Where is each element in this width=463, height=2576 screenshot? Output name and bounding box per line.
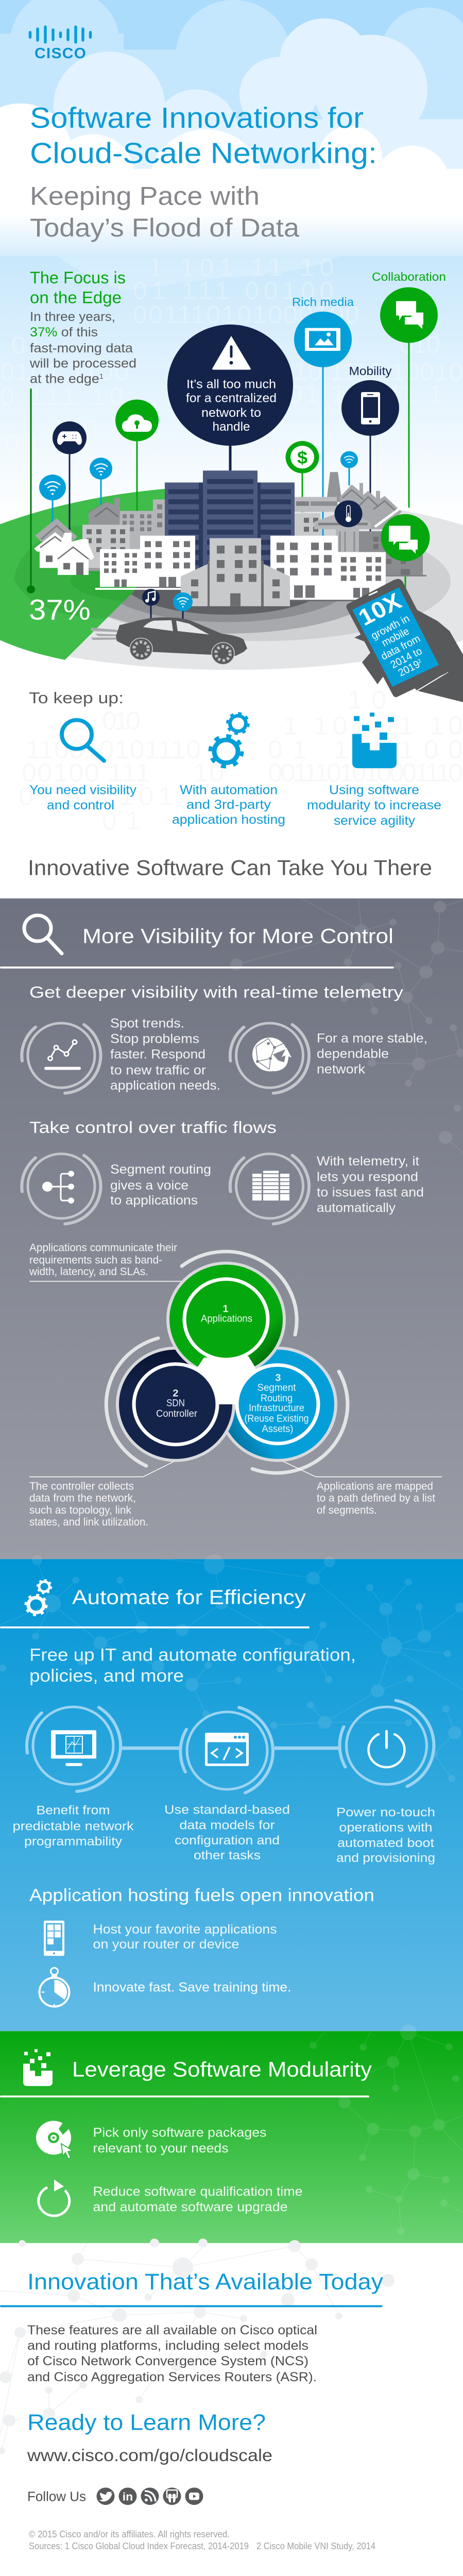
item: data models: data models for — [180, 1819, 275, 1832]
item: respond to issues: automatically — [317, 1201, 396, 1215]
item: no-touch operations: automated boot — [337, 1836, 434, 1850]
icon: white magnifier — [24, 916, 62, 954]
icon: dollar: $ — [297, 448, 307, 468]
big callout: too much for a centralized network: network to — [201, 406, 261, 420]
text block: the focus is on the edge: The Focus is — [30, 268, 126, 287]
panel: leverage software modularity — [0, 2024, 463, 2243]
item: host applications: Host your favorite applications — [93, 1922, 277, 1937]
subheading: free up IT: policies, and more — [29, 1666, 184, 1686]
text block: the focus is on the edge: on the Edge — [30, 289, 122, 307]
annotation: controller collects — [29, 1462, 174, 1528]
title — [30, 102, 377, 170]
text block: availability: These features are all available on Cisco optical — [27, 2324, 317, 2337]
icon: thermometer — [335, 500, 363, 527]
annotation: applications communicate: requirements such as band- — [29, 1253, 162, 1266]
text block: the focus is on the edge: will be processed — [29, 357, 136, 371]
annotation: applications communicate: width, latency, and SLAs. — [29, 1265, 148, 1278]
label: applications: 1 — [222, 1303, 229, 1314]
hand holding phone: 10X growth — [346, 579, 463, 702]
icon: rss — [141, 2487, 159, 2505]
heading: to keep up: To keep up: — [29, 689, 124, 707]
heading: innovation today: Innovation That’s Available Today — [27, 2269, 383, 2294]
item: spot trends: application needs. — [110, 1079, 220, 1093]
item: segment routing: Segment routing — [110, 1163, 211, 1177]
decorative binary digits in sky: 010 — [399, 331, 440, 359]
label: applications: Applications — [201, 1313, 252, 1324]
icon: youtube — [185, 2487, 203, 2505]
item: programmability: predictable network — [12, 1820, 134, 1833]
subheading: free up IT: Free up IT and automate configuration, — [29, 1645, 356, 1665]
item: stable network: For a more stable, — [317, 1031, 427, 1045]
cityscape ground ellipses — [0, 496, 463, 670]
captions: to keep up: With automation — [180, 783, 278, 797]
hand holding phone: 10X growth: data from — [379, 633, 422, 663]
37% statistic: 37% — [29, 594, 91, 626]
follow us: Follow Us — [27, 2489, 86, 2504]
decorative binary digits keep up — [19, 685, 463, 835]
heading: innovative software: Innovative Software Can Take You There — [28, 856, 432, 879]
text block: availability: and routing platforms, including select models — [27, 2339, 308, 2353]
decorative binary digits in sky: 01 10 111 1 — [288, 381, 443, 408]
item: spot trends: to new traffic or — [110, 1063, 207, 1077]
item: host applications — [44, 1921, 277, 1956]
callout: collaboration: Collaboration — [372, 270, 446, 283]
icon: car wifi — [173, 592, 193, 611]
label: SDN controller: 2 — [173, 1388, 179, 1399]
icon: small wifi right — [340, 451, 358, 468]
green edge wedge — [0, 488, 170, 660]
annotation: applications are mapped: Applications are mapped — [317, 1480, 433, 1492]
callout: rich media: Rich media — [292, 296, 354, 309]
label: SDN controller: Controller — [156, 1408, 197, 1419]
callout: mobility — [341, 365, 399, 436]
item: no-touch operations: operations with — [339, 1821, 432, 1835]
annotation: controller collects: data from the network, — [29, 1492, 136, 1504]
right back buildings and factory — [295, 472, 426, 577]
label: segment routing infrastructure: Segment — [258, 1382, 296, 1394]
item: pick packages — [36, 2121, 267, 2159]
icon: gears — [210, 714, 248, 767]
decorative binary digits in sky: 1 101 11 10 — [148, 254, 334, 281]
icon: dollar — [285, 441, 319, 473]
footnotes: Sources: 1 Cisco Global Cloud Index Forecast, 2014-2019 — [29, 2540, 249, 2551]
label: segment routing infrastructure: Assets) — [262, 1423, 294, 1435]
item: stable network: network — [317, 1062, 365, 1076]
connectors — [121, 1747, 339, 1750]
white building left — [95, 536, 195, 590]
icon: game controller — [53, 421, 87, 454]
item: spot trends: faster. Respond — [110, 1047, 205, 1061]
Cisco logo: CISCO — [35, 45, 86, 62]
item: spot trends: Spot trends. — [110, 1016, 184, 1030]
annotation: applications communicate — [29, 1241, 181, 1281]
item: stable network — [230, 1023, 427, 1093]
central navy towers — [165, 470, 295, 590]
item: reduce qualification time: and automate software upgrade — [93, 2200, 287, 2214]
icon: warning triangle — [212, 336, 251, 370]
item: pick packages: relevant to your needs — [93, 2142, 229, 2156]
item: respond to issues: lets you respond — [317, 1170, 418, 1184]
subtitle: Keeping Pace with — [30, 181, 260, 210]
decorative binary digits keep up: 01 11 101 — [19, 782, 173, 810]
item: pick packages: Pick only software packages — [93, 2126, 267, 2140]
captions: to keep up: and control — [47, 799, 114, 812]
annotation: controller collects: The controller collects — [29, 1480, 134, 1492]
white houses — [34, 532, 94, 575]
section heading: automate: Automate for Efficiency — [72, 1586, 306, 1608]
label: SDN controller — [156, 1388, 197, 1419]
hand holding phone: 10X growth: 2014 to — [388, 645, 424, 671]
label: segment routing infrastructure: (Reuse Existing — [244, 1413, 309, 1424]
panel: innovation available today — [0, 2239, 395, 2551]
panel: automate for efficiency — [0, 1554, 463, 2031]
hand holding phone: 10X growth: 10X — [354, 588, 406, 631]
subheading: telemetry: Get deeper visibility with real-time telemetry — [29, 983, 404, 1002]
hand holding phone: 10X growth: mobile — [380, 625, 411, 649]
icon: linkedin — [118, 2487, 137, 2505]
decorative binary digits keep up: 010 — [102, 706, 141, 735]
footnotes — [29, 2529, 375, 2551]
icon: wifi left — [39, 474, 66, 500]
footnotes: 2 Cisco Mobile VNI Study, 2014 — [256, 2540, 375, 2551]
annotation: controller collects: states, and link utilization. — [29, 1515, 148, 1528]
icon: collaboration lower — [381, 514, 430, 561]
item: respond to issues: With telemetry, it — [317, 1154, 419, 1168]
callout: mobility: Mobility — [349, 365, 392, 378]
item: no-touch operations: and provisioning — [336, 1851, 435, 1865]
icon: white gears — [26, 1580, 52, 1615]
Cisco logo — [30, 27, 91, 62]
annotation: controller collects: such as topology, link — [29, 1503, 131, 1516]
decorative binary digits keep up: 1 0 — [348, 685, 386, 714]
label: segment routing infrastructure — [244, 1372, 309, 1435]
text block: availability: and Cisco Aggregation Services Routers (ASR). — [27, 2370, 317, 2384]
decorative binary digits keep up: 00100 111 — [22, 758, 150, 787]
item: data models: other tasks — [194, 1849, 261, 1862]
captions: to keep up: service agility — [334, 814, 415, 828]
text block: the focus is on the edge: 37% of this — [30, 325, 98, 340]
decorative binary digits in sky: 0101 1100 — [0, 359, 129, 386]
title: Software Innovations for — [30, 102, 364, 134]
annotation: applications communicate: Applications communicate their — [29, 1241, 177, 1254]
item: reduce qualification time — [39, 2179, 302, 2216]
decorative binary digits in sky: 0 111 10 — [0, 383, 124, 411]
item: innovate fast: Innovate fast. Save training time. — [93, 1980, 291, 1995]
car — [91, 617, 247, 665]
icon: magnifier — [62, 720, 104, 761]
title: Cloud-Scale Networking: — [30, 137, 377, 170]
heading: ready to learn more: Ready to Learn More? — [27, 2410, 266, 2435]
icons: social — [97, 2487, 203, 2505]
item: spot trends: Stop problems — [110, 1032, 199, 1046]
subheading: traffic flows: Take control over traffic flows — [29, 1118, 277, 1137]
decorative binary digits keep up: 10 — [193, 758, 224, 787]
label: segment routing infrastructure: 3 — [275, 1372, 281, 1383]
hand holding phone: 10X growth: 2019 — [396, 658, 423, 679]
decorative binary digits keep up: 0011101010001110 — [268, 758, 463, 787]
captions: to keep up: Using software — [329, 783, 419, 797]
back buildings left — [35, 498, 165, 571]
item: respond to issues: to issues fast and — [317, 1185, 424, 1199]
section heading: leverage: Leverage Software Modularity — [72, 2058, 372, 2081]
icon: white modules — [23, 2049, 53, 2086]
item: host applications: on your router or device — [93, 1937, 239, 1952]
icon: linkedin: in — [123, 2490, 133, 2503]
centre front grey building — [181, 538, 290, 606]
subtitle — [30, 181, 300, 242]
url: www.cisco.com/go/cloudscale — [27, 2446, 272, 2465]
big callout: too much for a centralized network — [167, 325, 293, 446]
decorative binary digits in sky: 01 11 — [5, 430, 93, 458]
decorative binary digits keep up: 110010101110 — [26, 735, 201, 764]
icon: wifi middle — [90, 457, 112, 480]
decorative binary digits keep up: 010 — [345, 782, 386, 810]
decorative binary digits in sky: 001110101000100 — [133, 301, 359, 329]
captions: to keep up: application hosting — [172, 813, 285, 827]
callout: collaboration — [372, 270, 446, 343]
text block: the focus is on the edge: fast-moving data — [30, 341, 133, 355]
label: applications — [201, 1303, 252, 1324]
label: SDN controller: SDN — [166, 1398, 185, 1409]
item: spot trends — [22, 1016, 220, 1093]
item: programmability: programmability — [24, 1835, 123, 1849]
captions: to keep up: modularity to increase — [307, 799, 441, 812]
text block: the focus is on the edge — [29, 268, 136, 386]
decorative binary digits in sky — [0, 254, 463, 458]
captions: to keep up — [29, 783, 441, 828]
item: programmability — [12, 1707, 134, 1849]
item: no-touch operations — [336, 1701, 435, 1865]
captions: to keep up: You need visibility — [29, 783, 136, 797]
callout: rich media — [292, 296, 354, 367]
item: data models: configuration and — [175, 1834, 280, 1848]
item: programmability: Benefit from — [36, 1804, 110, 1817]
section heading: more visibility: More Visibility for More Control — [82, 925, 393, 947]
subheading: application hosting: Application hosting fuels open innovation — [29, 1886, 374, 1905]
subtitle: Today’s Flood of Data — [30, 213, 300, 242]
label: segment routing infrastructure: Infrastructure — [249, 1403, 304, 1414]
label: segment routing infrastructure: Routing — [261, 1393, 293, 1404]
text block: the focus is on the edge: at the edge — [30, 372, 97, 386]
decorative binary digits in sky: 01 — [11, 332, 42, 360]
annotation: applications are mapped: to a path defined by a list — [317, 1492, 435, 1504]
big callout: too much for a centralized network: for a centralized — [186, 392, 277, 405]
text block: availability: of Cisco Network Convergence System (NCS) — [27, 2354, 308, 2368]
icon: cloud lock — [115, 399, 159, 441]
diagram: three circles — [106, 1251, 348, 1473]
captions: to keep up: and 3rd-party — [186, 798, 271, 812]
hand holding phone: 10X growth: 2 — [417, 658, 422, 665]
item: data models: Use standard-based — [164, 1803, 290, 1817]
text block: the focus is on the edge: 1 — [99, 372, 104, 380]
item: respond to issues — [230, 1154, 424, 1224]
subheading: free up IT — [29, 1645, 356, 1686]
big callout: too much for a centralized network: handle — [213, 420, 250, 434]
item: data models — [164, 1707, 290, 1862]
icon: slideshare — [163, 2487, 181, 2505]
decorative binary digits keep up: 01 1 0100 — [268, 735, 463, 764]
icon: music — [142, 589, 160, 606]
annotation: applications are mapped: of segments. — [317, 1503, 377, 1516]
big callout: too much for a centralized network: It’s all too much — [186, 378, 276, 391]
footnotes: © 2015 Cisco and/or its affiliates. All rights reserved. — [29, 2529, 230, 2539]
hand holding phone: 10X growth: growth in — [369, 613, 411, 642]
icon: software modules — [352, 713, 397, 768]
annotation: applications are mapped — [283, 1462, 442, 1516]
item: innovate fast — [39, 1968, 291, 2007]
callout stems — [31, 343, 409, 620]
icon: twitter — [97, 2487, 114, 2505]
text block: the focus is on the edge: In three years, — [30, 310, 115, 324]
white building right — [270, 536, 386, 601]
text block: availability — [27, 2324, 317, 2384]
decorative binary digits keep up: 0 1 — [102, 806, 141, 835]
item: stable network: dependable — [317, 1047, 389, 1061]
item: segment routing — [22, 1154, 211, 1224]
panel: more visibility — [0, 899, 463, 1559]
item: segment routing: gives a voice — [110, 1178, 188, 1193]
decorative binary digits keep up: 1 101 11 10 — [283, 711, 463, 740]
decorative binary digits in sky: 10 1110 10010 — [294, 359, 463, 386]
sky and clouds background — [0, 0, 463, 527]
decorative binary digits in sky: 101 — [52, 416, 129, 443]
item: segment routing: to applications — [110, 1193, 198, 1208]
item: no-touch operations: Power no-touch — [336, 1806, 435, 1819]
item: reduce qualification time: Reduce software qualification time — [93, 2185, 302, 2199]
decorative binary digits in sky: 01 111 00100 — [133, 277, 334, 304]
